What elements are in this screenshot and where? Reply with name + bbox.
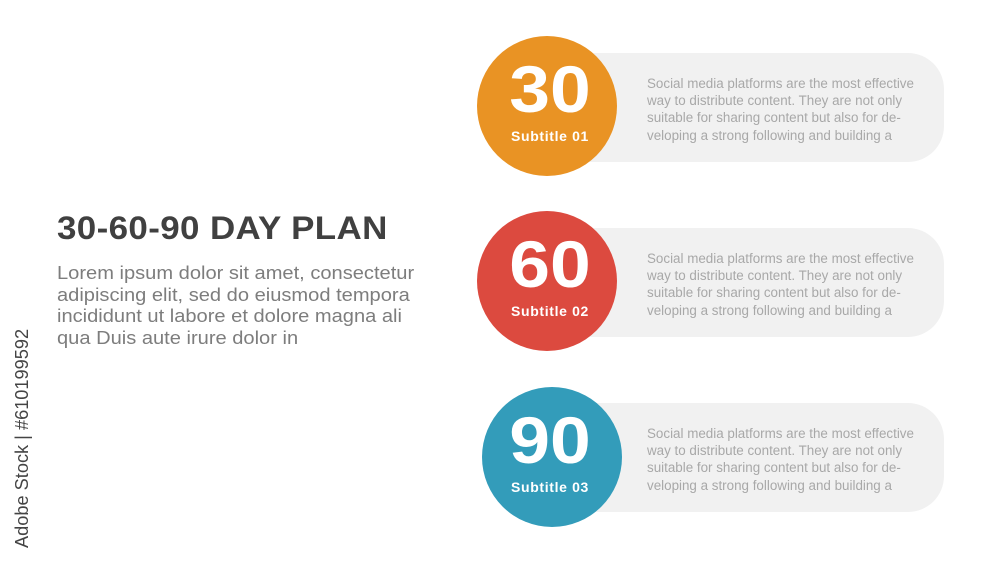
- text: card 90 body: suitable for sharing content but also for de-: [647, 460, 901, 475]
- watermark: stock id: Adobe Stock | #610199592: [12, 329, 32, 548]
- text: card 30 body: Social media platforms are the most effective: [647, 76, 914, 91]
- panel: card 30: [560, 53, 944, 162]
- circle: 30: 30: [509, 52, 591, 126]
- circle: 90: [482, 387, 622, 527]
- text: card 60 body: veloping a strong following and building a: [647, 303, 892, 318]
- text: card 90 body: [647, 426, 914, 493]
- text: card 60 body: suitable for sharing content but also for de-: [647, 285, 901, 300]
- circle: 30: Subtitle 01: [511, 128, 589, 144]
- intro paragraph: qua Duis aute irure dolor in: [57, 327, 298, 348]
- text: card 60 body: Social media platforms are the most effective: [647, 251, 914, 266]
- text: card 90 body: veloping a strong following and building a: [647, 478, 892, 493]
- circle: 90: Subtitle 03: [511, 478, 589, 494]
- text: card 60 body: way to distribute content. They are not only: [647, 268, 902, 283]
- text: card 30 body: suitable for sharing content but also for de-: [647, 110, 901, 125]
- text: card 90 body: Social media platforms are the most effective: [647, 426, 914, 441]
- circle: 30: [477, 36, 617, 176]
- intro paragraph: [57, 262, 414, 348]
- panel: card 60: [560, 228, 944, 337]
- circle: 60: Subtitle 02: [511, 302, 589, 318]
- circle: 90: 90: [509, 403, 591, 477]
- text: card 90 body: way to distribute content. They are not only: [647, 443, 902, 458]
- title: 30-60-90 DAY PLAN: [57, 210, 388, 246]
- text: card 30 body: veloping a strong following and building a: [647, 128, 892, 143]
- intro paragraph: Lorem ipsum dolor sit amet, consectetur: [57, 262, 414, 283]
- text: card 60 body: [647, 251, 914, 318]
- intro paragraph: adipiscing elit, sed do eiusmod tempora: [57, 284, 410, 305]
- circle: 60: [477, 211, 617, 351]
- text: card 30 body: [647, 76, 914, 143]
- panel: card 90: [560, 403, 944, 512]
- text: card 30 body: way to distribute content. They are not only: [647, 93, 902, 108]
- intro paragraph: incididunt ut labore et dolore magna ali: [57, 305, 402, 326]
- circle: 60: 60: [509, 227, 591, 301]
